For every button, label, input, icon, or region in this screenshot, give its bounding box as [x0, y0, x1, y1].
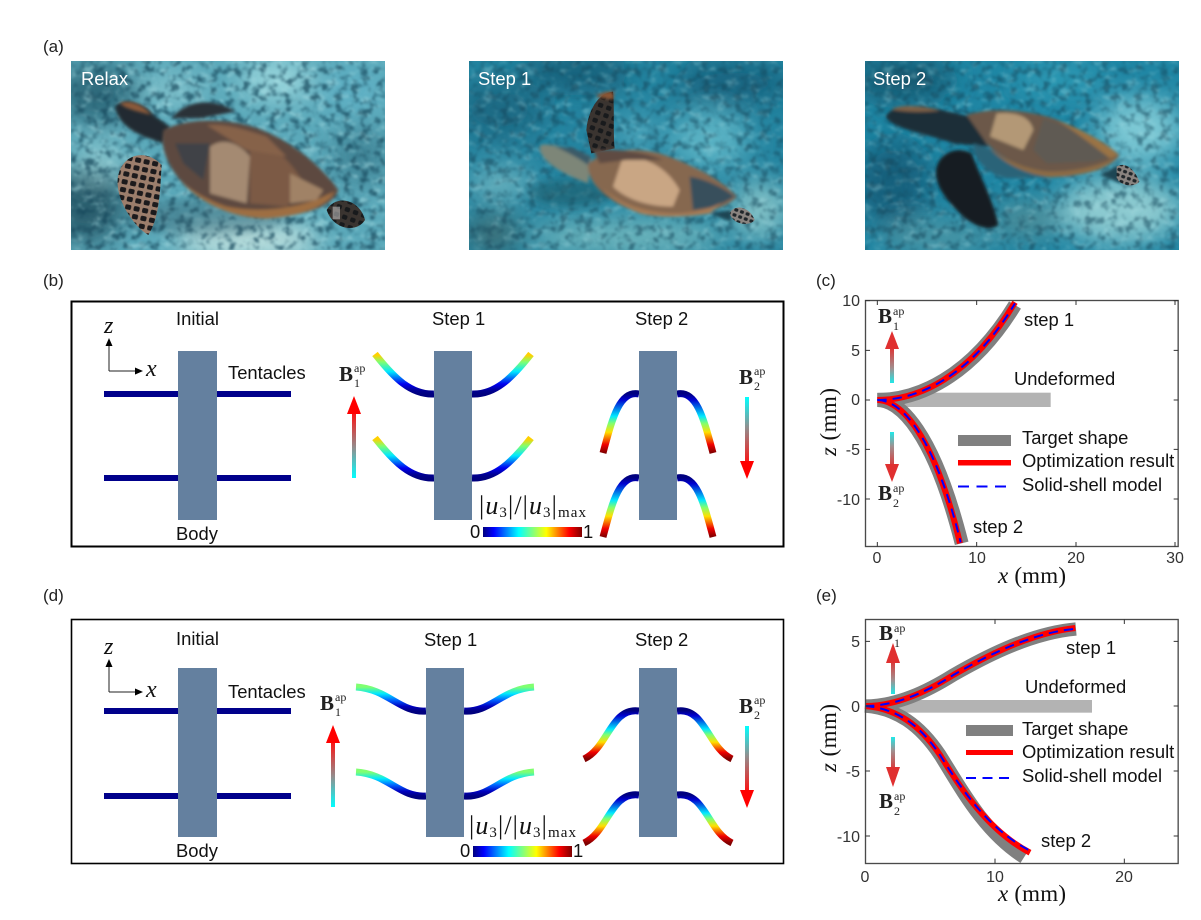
arrow: B2 field: [878, 432, 904, 510]
photo: turtle step 2: [853, 60, 1183, 253]
curve labels: [973, 309, 1115, 537]
colorbar: 0: [460, 840, 470, 861]
arrow: B1 applied field: [320, 690, 346, 807]
arrow: B2 field: 2: [893, 496, 899, 510]
curve labels: step 1: [1066, 637, 1116, 658]
legend: Target shape: [1022, 718, 1128, 739]
axis tick labels: [837, 634, 1133, 886]
step 2 title: Step 2: [635, 308, 688, 329]
legend: Solid-shell model: [1022, 474, 1162, 495]
arrow: B1 field: 1: [894, 636, 900, 650]
colorbar: |u: [479, 491, 498, 520]
arrow: B2 field: [879, 737, 905, 818]
curve labels: step 2: [1041, 830, 1091, 851]
arrow: B2 field: ap: [894, 789, 905, 803]
chart e: deformation curves: [816, 619, 1178, 906]
step 1 body: [426, 668, 464, 837]
arrow: B1 applied field: [339, 361, 365, 478]
initial state: [104, 628, 306, 861]
arrow: B2 field: B: [878, 481, 892, 505]
arrow: B1 applied field: ap: [354, 361, 365, 375]
colorbar: [470, 491, 593, 542]
step 1 title: Step 1: [432, 308, 485, 329]
photo: turtle step 2: Step 2: [873, 68, 926, 89]
arrow: B2 applied field: B: [739, 365, 753, 389]
photo: turtle step 1: Step 1: [478, 68, 531, 89]
axes triad: z: [103, 634, 114, 660]
photo: turtle step 1: [456, 60, 790, 257]
axes triad: [103, 634, 157, 703]
step 1 tentacles: [356, 687, 534, 796]
arrow: B1 applied field: ap: [335, 690, 346, 704]
chart c: deformation curves: [816, 293, 1184, 588]
colorbar: 3: [543, 505, 551, 521]
arrow: B1 field: B: [879, 621, 893, 645]
curve labels: step 1: [1024, 309, 1074, 330]
curve labels: step 2: [973, 516, 1023, 537]
legend: Optimization result: [1022, 741, 1174, 762]
axis tick labels: -5: [846, 764, 860, 781]
arrow: B1 applied field: B: [320, 691, 334, 715]
panel label (a): (a): [43, 37, 64, 56]
initial state: Initial: [176, 308, 219, 329]
colorbar: 1: [573, 840, 583, 861]
axis tick labels: 5: [851, 634, 860, 651]
arrow: B1 field: [878, 304, 904, 383]
arrow: B2 applied field: B: [739, 694, 753, 718]
colorbar: |u: [469, 811, 488, 840]
z axis title: z (mm): [816, 704, 841, 773]
arrow: B2 field: B: [879, 789, 893, 813]
arrow: B2 applied field: [739, 693, 765, 808]
axis tick labels: 20: [1115, 869, 1133, 886]
axes triad: x: [145, 356, 157, 382]
axis tick labels: 0: [861, 869, 870, 886]
axes triad: x: [145, 677, 157, 703]
colorbar: 3: [533, 825, 541, 841]
colorbar: |/|: [498, 811, 518, 840]
axis tick labels: 0: [851, 699, 860, 716]
step 2 title: Step 2: [635, 629, 688, 650]
colorbar: u: [519, 811, 532, 840]
x axis title: x (mm): [997, 563, 1066, 588]
curve labels: Undeformed: [1014, 368, 1115, 389]
arrow: B2 field: ap: [893, 481, 904, 495]
arrow: B1 field: B: [878, 304, 892, 328]
arrow: B1 field: ap: [893, 304, 904, 318]
arrow: B2 applied field: ap: [754, 364, 765, 378]
colorbar: 0: [470, 521, 480, 542]
initial state: Tentacles: [228, 362, 306, 383]
step 2 body: [639, 351, 677, 520]
initial state: Tentacles: [228, 681, 306, 702]
x axis title: x (mm): [997, 881, 1066, 906]
colorbar: u: [529, 491, 542, 520]
step 2 tentacles: [584, 711, 732, 843]
panel label (c): (c): [816, 271, 836, 290]
panel d: tentacle schematic: [72, 620, 784, 864]
initial state: [104, 308, 306, 544]
colorbar: |: [552, 491, 557, 520]
colorbar: max: [548, 825, 576, 841]
axis tick labels: -10: [837, 492, 860, 509]
step 1 body: [434, 351, 472, 520]
arrow: B1 applied field: 1: [354, 376, 360, 390]
axis tick labels: 5: [851, 343, 860, 360]
colorbar: |: [542, 811, 547, 840]
arrow: B2 applied field: 2: [754, 708, 760, 722]
axis tick labels: 10: [986, 869, 1004, 886]
axes triad: [103, 313, 157, 382]
arrow: B1 field: [879, 621, 905, 694]
curve labels: Undeformed: [1025, 676, 1126, 697]
axis tick labels: 10: [842, 293, 860, 310]
legend: Optimization result: [1022, 450, 1174, 471]
axis tick labels: 30: [1166, 550, 1184, 567]
axis tick labels: 10: [968, 550, 986, 567]
arrow: B1 field: 1: [893, 319, 899, 333]
panel label (b): (b): [43, 271, 64, 290]
colorbar: 1: [583, 521, 593, 542]
colorbar: 3: [499, 505, 507, 521]
colorbar: |/|: [508, 491, 528, 520]
axis tick labels: 0: [851, 392, 860, 409]
panel b: tentacle schematic: [72, 302, 784, 546]
curve labels: [1025, 637, 1126, 851]
step 2 tentacles: [603, 394, 713, 537]
step 2 body: [639, 668, 677, 837]
axis tick labels: 0: [873, 550, 882, 567]
legend: [966, 718, 1174, 786]
arrow: B2 applied field: [739, 364, 765, 479]
arrow: B2 applied field: ap: [754, 693, 765, 707]
initial state: Initial: [176, 628, 219, 649]
arrow: B1 applied field: B: [339, 362, 353, 386]
axis tick labels: 20: [1067, 550, 1085, 567]
legend: Target shape: [1022, 427, 1128, 448]
step 1 tentacles: [375, 354, 531, 478]
arrow: B2 field: 2: [894, 804, 900, 818]
colorbar: [460, 811, 583, 861]
axis tick labels: [837, 293, 1184, 567]
arrow: B2 applied field: 2: [754, 379, 760, 393]
z axis title: z (mm): [816, 388, 841, 457]
panel label (e): (e): [816, 586, 837, 605]
axis tick labels: -10: [837, 829, 860, 846]
arrow: B1 field: ap: [894, 621, 905, 635]
legend: [958, 427, 1174, 495]
initial state: Body: [176, 523, 219, 544]
colorbar: max: [558, 505, 586, 521]
step 1 title: Step 1: [424, 629, 477, 650]
photo: turtle relax: Relax: [81, 68, 128, 89]
panel label (d): (d): [43, 586, 64, 605]
photo: turtle relax: [47, 60, 390, 257]
axes triad: z: [103, 313, 114, 339]
legend: Solid-shell model: [1022, 765, 1162, 786]
axis tick labels: -5: [846, 442, 860, 459]
colorbar: 3: [489, 825, 497, 841]
initial state: Body: [176, 840, 219, 861]
arrow: B1 applied field: 1: [335, 705, 341, 719]
